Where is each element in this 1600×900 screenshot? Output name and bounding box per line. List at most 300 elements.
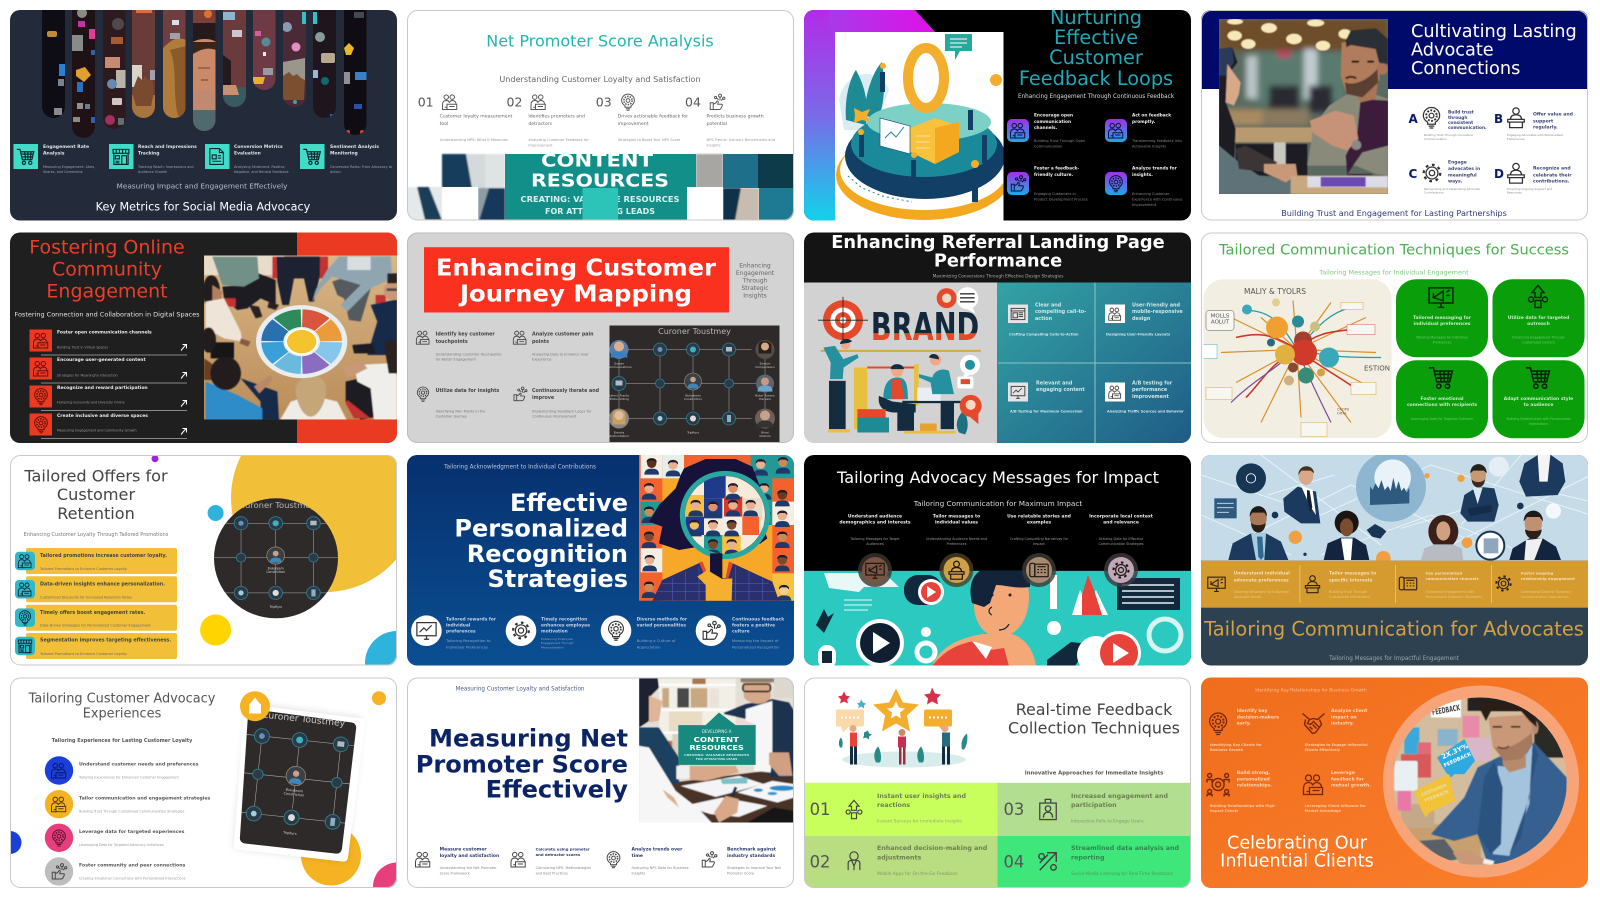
item 02: 02: [506, 94, 522, 110]
cell 03: [997, 783, 1191, 836]
item: client impact: Strategies to Engage Influential: [1305, 743, 1368, 747]
card: emotional connections: [1396, 360, 1488, 438]
card: adapt style: Adapt communication style: [1504, 396, 1573, 402]
cell 03: Increased engagement and: [1071, 793, 1168, 800]
panel: Effective Personalized Recognition Strategies: [407, 455, 794, 666]
band item: channels: [1399, 570, 1482, 599]
metric: Conversion Metrics Evaluation: Negative, and Neutral Feedback: [234, 170, 289, 174]
column: values: Understanding Audience Needs and: [926, 537, 987, 541]
item: Analyze trends: Improvement: [1132, 203, 1157, 207]
column: values: individual values: [935, 519, 978, 525]
item 02: Identifies promoters and: [528, 114, 585, 120]
metric: Conversion Metrics Evaluation: Analyzing Sentiment: Positive,: [234, 165, 286, 169]
offer 3: [15, 605, 177, 631]
title: Strategies: [487, 565, 628, 593]
cell: mobile-responsive: mobile-responsive: [1132, 309, 1183, 315]
offer 2: [15, 576, 177, 602]
journey chart image: Binal: [761, 430, 769, 434]
item A: A: [1408, 112, 1418, 126]
title: Tailoring Customer Advocacy: [28, 691, 216, 706]
journey chart image: Toxturniliting: [608, 397, 629, 401]
item C: Recognizing and Celebrating Advocate: [1424, 187, 1480, 191]
panel: Enhancing Customer Journey Mapping: [407, 232, 794, 444]
item: decision makers: Business Growth: [1210, 748, 1244, 752]
item: Act on feedback: Actionable Insights: [1132, 144, 1166, 148]
item: decision makers: early.: [1237, 720, 1251, 726]
column: values: Tailor messages to: [933, 513, 980, 519]
title banner: Journey Mapping: [458, 280, 692, 308]
subtitle: Fostering Connection and Collaboration in Digital Spaces: [14, 310, 200, 318]
item: continuous feedback: fosters a positive: [732, 622, 775, 628]
item A: Build trust: [1448, 110, 1474, 116]
illustration: man with play buttons: [804, 567, 1191, 675]
column: audience: demographics and interests: [839, 519, 911, 525]
item: Foster a feedback-friendly culture: Foster a feedback-: [1034, 166, 1079, 172]
photo: content resources meeting: DEVELOPING A: [702, 729, 732, 734]
item: touchpoints: Identify key customer: [436, 333, 495, 338]
item: benchmark: Promoter Score: [727, 872, 754, 876]
cell 02: 02: [810, 852, 830, 871]
subtitle: Maximizing Conversions Through Effective Design Strategies: [933, 274, 1064, 280]
item B: Offer value and: [1533, 112, 1573, 118]
image strips: [42, 5, 367, 145]
circular photo: man with feedback cards: FEEDBACK: [1431, 703, 1461, 717]
photo: content resources meeting: FOR ATTRACTING LEADS: [696, 757, 737, 761]
band item: engagement: [1496, 570, 1575, 599]
item: iterate: [514, 387, 600, 418]
offer 4: [15, 633, 177, 659]
item A: Building Trust Through Consistent: [1424, 133, 1473, 137]
item: pain points: [513, 331, 594, 362]
title: Experiences: [83, 706, 162, 721]
image: content resources: CREATING: VALUABLE RESOURCES: [520, 194, 680, 204]
item D: [1494, 163, 1572, 194]
title: Engagement: [46, 280, 168, 302]
item: tailored rewards: Tailored rewards for: [446, 618, 496, 622]
item: measure: Measure customer: [440, 847, 487, 852]
panel: Nurturing Effective Customer Feedback Loops: [804, 6, 1191, 220]
cell: clear call-to-action: [1008, 302, 1086, 336]
item: Encourage open communication: channels.: [1034, 124, 1058, 130]
offer 3: Timely offers boost engagement rates.: [40, 610, 145, 616]
item: tailored rewards: preferences: [446, 628, 476, 634]
card: targeted outreach: outreach: [1527, 321, 1550, 327]
title: Tailoring Advocacy Messages for Impact: [836, 468, 1159, 487]
cell: clear call-to-action: Crafting Compelling Calls-to-Action: [1009, 332, 1079, 336]
step: data: Leveraging Data for Targeted Advocacy Initiatives: [79, 843, 164, 847]
circular journey chart image: [198, 495, 351, 625]
item: timely recognition: Timely recognition: [541, 618, 587, 622]
item 04: Insights: [706, 144, 721, 148]
journey chart image: Constriction: [684, 397, 702, 401]
item B: regularly.: [1533, 124, 1558, 130]
subtitle: Enhancing Customer Loyalty Through Tailored Promotions: [24, 532, 169, 538]
card: targeted outreach: [1492, 279, 1584, 357]
journey chart image: Ctobolo: [759, 434, 771, 438]
item: relationships: personalized: [1237, 776, 1270, 782]
item: trends: [607, 846, 689, 876]
item: iterate: Continuously iterate and: [532, 389, 599, 394]
card: tailored messaging: Tailored messaging for: [1413, 315, 1472, 321]
item: decision makers: decision-makers: [1237, 714, 1279, 720]
item: diverse methods: Appreciation: [637, 644, 661, 649]
item 03: 03: [596, 94, 612, 110]
item D: D: [1494, 167, 1504, 181]
row: user-generated content: [30, 357, 187, 384]
band: [1201, 561, 1588, 608]
item: Foster a feedback-friendly culture: [1007, 166, 1088, 202]
title: Tailored Communication Techniques for Success: [1218, 242, 1569, 259]
title: Influential Clients: [1220, 852, 1374, 872]
item: client impact: Analyze client: [1331, 709, 1367, 714]
column: stories: Crafting Compelling Narratives for: [1010, 537, 1069, 541]
item: benchmark: Benchmark against: [727, 847, 776, 852]
item: pain points: points: [532, 339, 549, 345]
cell: mobile-responsive: [1105, 302, 1183, 336]
offer 3: Data-Driven Strategies for Personalized Customer Engagement: [40, 624, 151, 628]
item: Analyze trends: Analyze trends for: [1132, 166, 1177, 172]
row: recognize and reward: [30, 385, 187, 411]
item: timely recognition: Enhancing Employee: [541, 637, 573, 641]
item 01: tool: [440, 120, 448, 126]
cell 03: participation: [1071, 802, 1117, 809]
item: measure: Understanding the Net Promoter: [440, 866, 497, 870]
column: stories: examples: [1027, 519, 1051, 525]
subtitle: Tailoring Acknowledgment to Individual Contributions: [443, 464, 596, 470]
item: continuous feedback: [696, 615, 784, 649]
item: client impact: Clients Effectively: [1305, 748, 1341, 752]
row: inclusive spaces: [30, 413, 187, 439]
item A: Communication: [1424, 137, 1447, 141]
step: data: [45, 824, 185, 852]
item: mutual growth: feedback for: [1331, 776, 1364, 782]
card: tailored messaging: [1396, 279, 1488, 357]
cell: relevant content: [1008, 380, 1085, 414]
item 01: [418, 94, 512, 142]
illustration: team on network background: [1201, 452, 1591, 566]
item 03: improvement: [618, 120, 649, 126]
item: measure: loyalty and satisfaction: [440, 853, 499, 859]
band item: interests: [1305, 570, 1376, 599]
item: continuous feedback: Measuring the Impact of: [732, 638, 778, 643]
subtitle: Identifying Key Relationships for Business Growth: [1255, 688, 1367, 694]
metric: Reach and Impressions Tracking: Reach and Impressions: [138, 145, 197, 150]
photo: content resources meeting: [639, 678, 795, 823]
metric: Conversion Metrics Evaluation: [205, 144, 289, 174]
step: strategies: [45, 790, 211, 818]
metric: Reach and Impressions Tracking: Tracking: [138, 150, 159, 156]
card: tailored messaging: Tailoring Messages for Individual: [1415, 336, 1468, 340]
item: trends: time: [632, 853, 643, 859]
band item: preferences: Advocate Needs: [1234, 595, 1261, 599]
band item: preferences: Tailoring Messages for Individual: [1234, 590, 1289, 594]
item D: contributions.: [1533, 178, 1570, 184]
title: Recognition: [467, 540, 628, 568]
panel: Tailored Offers for Customer Retention: [10, 404, 429, 695]
title: Key Metrics for Social Media Advocacy: [96, 200, 311, 214]
item: trends: Analyze trends over: [632, 847, 682, 852]
band item: channels: Enhancing Engagement with: [1426, 590, 1474, 594]
band item: engagement: relationship engagement: [1521, 576, 1575, 580]
item: benchmark: Strategies to Improve Your Net: [727, 866, 781, 870]
panel: Cultivating Lasting Advocate Connections: [1201, 10, 1588, 220]
tilted journey chart card: Bukateam: [285, 788, 303, 793]
decorative circles: [0, 691, 421, 900]
column: stories: [1007, 513, 1071, 587]
photo: content resources meeting: RESOURCES: [689, 744, 744, 752]
item C: meaningful: [1448, 172, 1477, 178]
subtitle: Enhancing Engagement Through Continuous Feedback: [1018, 94, 1175, 100]
cell: A/B testing: improvement: [1132, 394, 1169, 400]
title: Tailored Offers for: [23, 466, 168, 485]
metric: Engagement Rate Analysis: [14, 144, 95, 174]
title: Retention: [57, 504, 135, 522]
item B: Experiences: [1507, 137, 1525, 141]
item D: Providing Ongoing Support and: [1507, 187, 1552, 191]
card: adapt style: Interactions: [1529, 422, 1548, 426]
column: audience: Understand audience: [848, 513, 902, 519]
item 04: NPS Trends: Industry Benchmarks and: [706, 138, 775, 142]
item: data: Customer Journey: [436, 414, 467, 418]
item: calculate: and Best Practices: [536, 872, 568, 876]
panel: Measuring Net Promoter Score Effectively: [407, 678, 795, 888]
card: tailored messaging: individual preferences: [1414, 321, 1471, 327]
item: Encourage open communication: Communication: [1034, 144, 1062, 148]
item: calculate: Calculating NPS: Methodologies: [536, 866, 591, 870]
metric: Sentiment Analysis Monitoring: Action: [330, 170, 341, 174]
illustration: magnifier over faces: [639, 455, 794, 601]
step: strategies: Tailor communication and engagement strategies: [79, 795, 211, 801]
cell: A/B testing: performance: [1132, 387, 1168, 393]
band item: interests: Customized Interactions: [1329, 595, 1370, 599]
column: stories: Use relatable stories and: [1007, 513, 1071, 519]
illustration: brand team: [818, 287, 982, 434]
column: audience: [839, 513, 911, 587]
item: Encourage open communication: [1007, 112, 1085, 148]
title banner: [424, 247, 729, 312]
item: mutual growth: Market Advantage: [1305, 809, 1342, 813]
title: Measuring Net: [429, 724, 628, 752]
subtitle: Tailoring Messages for Impactful Engagement: [1328, 656, 1460, 662]
item 01: Understanding NPS: What It Measures: [440, 138, 508, 142]
side subtitle: Strategic: [741, 284, 769, 292]
mind map image: MALIY & TYOLRS: [1244, 287, 1306, 296]
offer 4: Tailored Promotions to Enhance Customer Loyalty: [39, 652, 127, 656]
item: calculate: and detractor scores: [536, 852, 581, 857]
item 04: 04: [685, 94, 701, 110]
tilted journey chart card: Curoner Toustmey: [261, 711, 346, 729]
column: local context: and relevance: [1103, 519, 1139, 525]
band item: channels: communication channels: [1426, 576, 1479, 580]
item 04: [685, 94, 775, 148]
circular journey chart image: Bukateam: [268, 567, 284, 571]
footer subtitle: Building Trust and Engagement for Lasting Partnerships: [1281, 208, 1507, 218]
title: Promoter Score: [416, 750, 628, 778]
band item: engagement: Foster ongoing: [1521, 570, 1553, 576]
journey chart image: Sahnic Franto: [609, 394, 629, 398]
image: content resources: RESOURCES: [531, 170, 669, 192]
cell 03: 03: [1004, 800, 1024, 819]
circular journey chart image: Constriction: [266, 570, 285, 574]
title: Effective: [1054, 26, 1138, 48]
row: recognize and reward: Fostering Inclusivity and Diversity Online: [57, 400, 125, 404]
tilted journey chart card: TripRyrs: [282, 830, 297, 836]
item: Analyze trends: Experience with Continuous: [1132, 198, 1182, 202]
step: needs: Understand customer needs and preferences: [79, 762, 199, 768]
cell 01: Instant user insights and: [877, 793, 966, 800]
image: content resources: CONTENT: [541, 150, 654, 172]
journey chart image: Anthontation: [609, 434, 629, 438]
panel: Tailored Communication Techniques for Success: [1201, 232, 1588, 443]
cell 02: [804, 836, 997, 888]
column: local context: Utilizing Data for Effective: [1099, 537, 1143, 541]
tilted journey chart card: [205, 691, 385, 862]
journey chart image: Rotar Toxano: [755, 394, 775, 398]
cell: mobile-responsive: User-friendly and: [1132, 302, 1180, 308]
cell: mobile-responsive: design: [1132, 316, 1151, 322]
title: Effective: [510, 489, 628, 517]
item C: ways.: [1448, 179, 1463, 184]
cell: clear call-to-action: action: [1035, 316, 1053, 322]
item B: [1494, 108, 1573, 141]
item: iterate: improve: [532, 394, 555, 400]
item: tailored rewards: Individual Preferences: [446, 644, 488, 649]
title: Connections: [1411, 59, 1520, 79]
cell: A/B testing: A/B testing for: [1132, 380, 1172, 386]
title: Fostering Online: [29, 236, 185, 258]
item: trends: Insights: [632, 872, 645, 876]
item C: Contributions: [1424, 190, 1444, 194]
item: touchpoints: touchpoints: [436, 339, 468, 345]
circular photo: man with feedback cards: FEEDBACK: [1424, 789, 1450, 804]
journey chart image: Ennota: [614, 430, 624, 434]
panel: Key Metrics for Social Media Advocacy: [10, 5, 397, 220]
item: continuous feedback: Personalized Recognition: [732, 644, 780, 649]
panel: Tailoring Communication for Advocates: [1201, 452, 1591, 666]
item C: advocates in: [1448, 166, 1480, 172]
side subtitle: Insights: [743, 292, 767, 299]
item A: communication.: [1448, 124, 1487, 130]
item: mutual growth: Leveraging Client Influence for: [1305, 804, 1366, 808]
cell 02: Enhanced decision-making and: [877, 845, 987, 852]
journey chart image: Bukateam: [685, 394, 701, 398]
item: iterate: Continuous Improvement: [532, 414, 577, 418]
cell: relevant content: A/B Testing for Maximum Conversion: [1010, 410, 1083, 414]
item 01: Customer loyalty measurement: [440, 114, 512, 120]
column: values: [926, 513, 987, 587]
item B: Engaging Advocates with Personalized: [1507, 133, 1563, 137]
journey chart image: [606, 326, 780, 444]
title: Enhancing Referral Landing Page: [831, 232, 1165, 253]
item: trends: Analyzing NPS Data for Business: [632, 866, 689, 870]
item: Foster a feedback-friendly culture: friendly culture.: [1034, 172, 1074, 178]
item C: C: [1408, 167, 1418, 181]
cell 04: Streamlined data analysis and: [1071, 845, 1179, 852]
journey chart image: Gowan: [614, 362, 624, 366]
card: emotional connections: connections with recipients: [1407, 402, 1477, 408]
offer 1: [15, 548, 177, 574]
item: benchmark: [702, 846, 781, 876]
item: mutual growth: [1304, 770, 1371, 813]
step: needs: Tailoring Experiences for Enhanced Customer Engagement: [78, 776, 179, 780]
cell: A/B testing: Analyzing Traffic Sources and Behavior: [1107, 410, 1184, 414]
item: Act on feedback: [1105, 112, 1182, 148]
cell 04: Social Media Listening for Real-Time Reactions: [1071, 871, 1174, 877]
metric: Conversion Metrics Evaluation: Evaluation: [234, 150, 261, 156]
item: Foster a feedback-friendly culture: Engaging Customers in: [1034, 192, 1076, 196]
item: data: Utilize data for insights: [436, 388, 499, 394]
wheel graphic: [256, 305, 347, 378]
panel: Fostering Online Community Engagement: [10, 232, 401, 444]
mind map image: [1203, 279, 1392, 438]
mind map image: ESTION: [1364, 364, 1390, 372]
item: Encourage open communication: Encourage open: [1034, 114, 1073, 118]
row: open communication: Building Trust in Virtual Spaces: [57, 346, 108, 350]
item: Analyze trends: insights.: [1132, 172, 1153, 178]
band item: engagement: Communication Approaches: [1521, 595, 1569, 599]
item: tailored rewards: Tailoring Recognition to: [446, 638, 490, 643]
title: Celebrating Our: [1227, 834, 1368, 854]
item: decision makers: Identify key: [1237, 709, 1267, 714]
item: client impact: [1302, 708, 1368, 752]
title: Effectively: [486, 776, 628, 804]
card: emotional connections: Foster emotional: [1420, 396, 1464, 402]
subtitle: Innovative Approaches for Immediate Insights: [1025, 770, 1163, 776]
row: inclusive spaces: Measuring Engagement and Community Growth: [57, 428, 137, 432]
illustration: feedback loop platform: [835, 32, 1012, 220]
metric: Engagement Rate Analysis: Engagement Rate: [43, 145, 89, 150]
cell: relevant content: engaging content: [1036, 387, 1085, 393]
metric: Sentiment Analysis Monitoring: Conversion Rates: From Advocacy to: [330, 165, 392, 169]
step: strategies: Building Trust Through Customized Communication Strategies: [79, 810, 185, 814]
item: benchmark: industry standards: [727, 853, 775, 859]
row: open communication: [30, 330, 187, 356]
photo: two people talking: [1219, 19, 1388, 194]
item: Act on feedback: Act on feedback: [1132, 114, 1171, 118]
panel: Celebrating Our Influential Clients: [1201, 678, 1588, 888]
panel: Tailoring Advocacy Messages for Impact: [804, 455, 1191, 675]
row: recognize and reward: Recognize and reward participation: [57, 385, 148, 391]
item: iterate: Implementing Feedback Loops for: [532, 410, 591, 414]
cell 01: Instant Surveys for Immediate Insights: [877, 819, 963, 825]
circular photo: man with feedback cards: [1383, 686, 1579, 878]
item: timely recognition: Personalization: [541, 645, 564, 649]
title: Net Promoter Score Analysis: [486, 32, 714, 50]
band item: interests: specific interests: [1329, 577, 1373, 583]
cell: A/B testing: [1105, 380, 1184, 414]
circular journey chart image: TripRyrs: [268, 605, 282, 609]
card: adapt style: Building Relationships with Personalized: [1506, 417, 1571, 421]
journey chart image: Hervars: [759, 397, 771, 401]
offer 1: Tailored Promotions to Enhance Customer Loyalty: [39, 567, 127, 571]
step: community: Foster community and peer connections: [79, 863, 186, 869]
item: touchpoints: for Better Engagement: [436, 358, 476, 362]
metric: Engagement Rate Analysis: Shares, and Comments: [43, 170, 83, 174]
card: adapt style: to audience: [1524, 402, 1553, 408]
subtitle: Measuring Impact and Engagement Effectively: [117, 182, 288, 190]
column: local context: Incorporate local context: [1089, 513, 1154, 519]
panel: Tailoring Customer Advocacy Experiences: [0, 678, 421, 900]
title banner: Enhancing Customer: [436, 254, 716, 282]
band item: preferences: Understand individual: [1234, 572, 1290, 576]
panel: Net Promoter Score Analysis: [407, 10, 794, 221]
item B: support: [1533, 118, 1554, 124]
item A: [1408, 107, 1487, 141]
title: Advocate: [1411, 40, 1494, 60]
title: Personalized: [454, 515, 628, 543]
item 02: [506, 94, 589, 148]
offer 1: Tailored promotions increase customer loyalty.: [40, 553, 167, 559]
